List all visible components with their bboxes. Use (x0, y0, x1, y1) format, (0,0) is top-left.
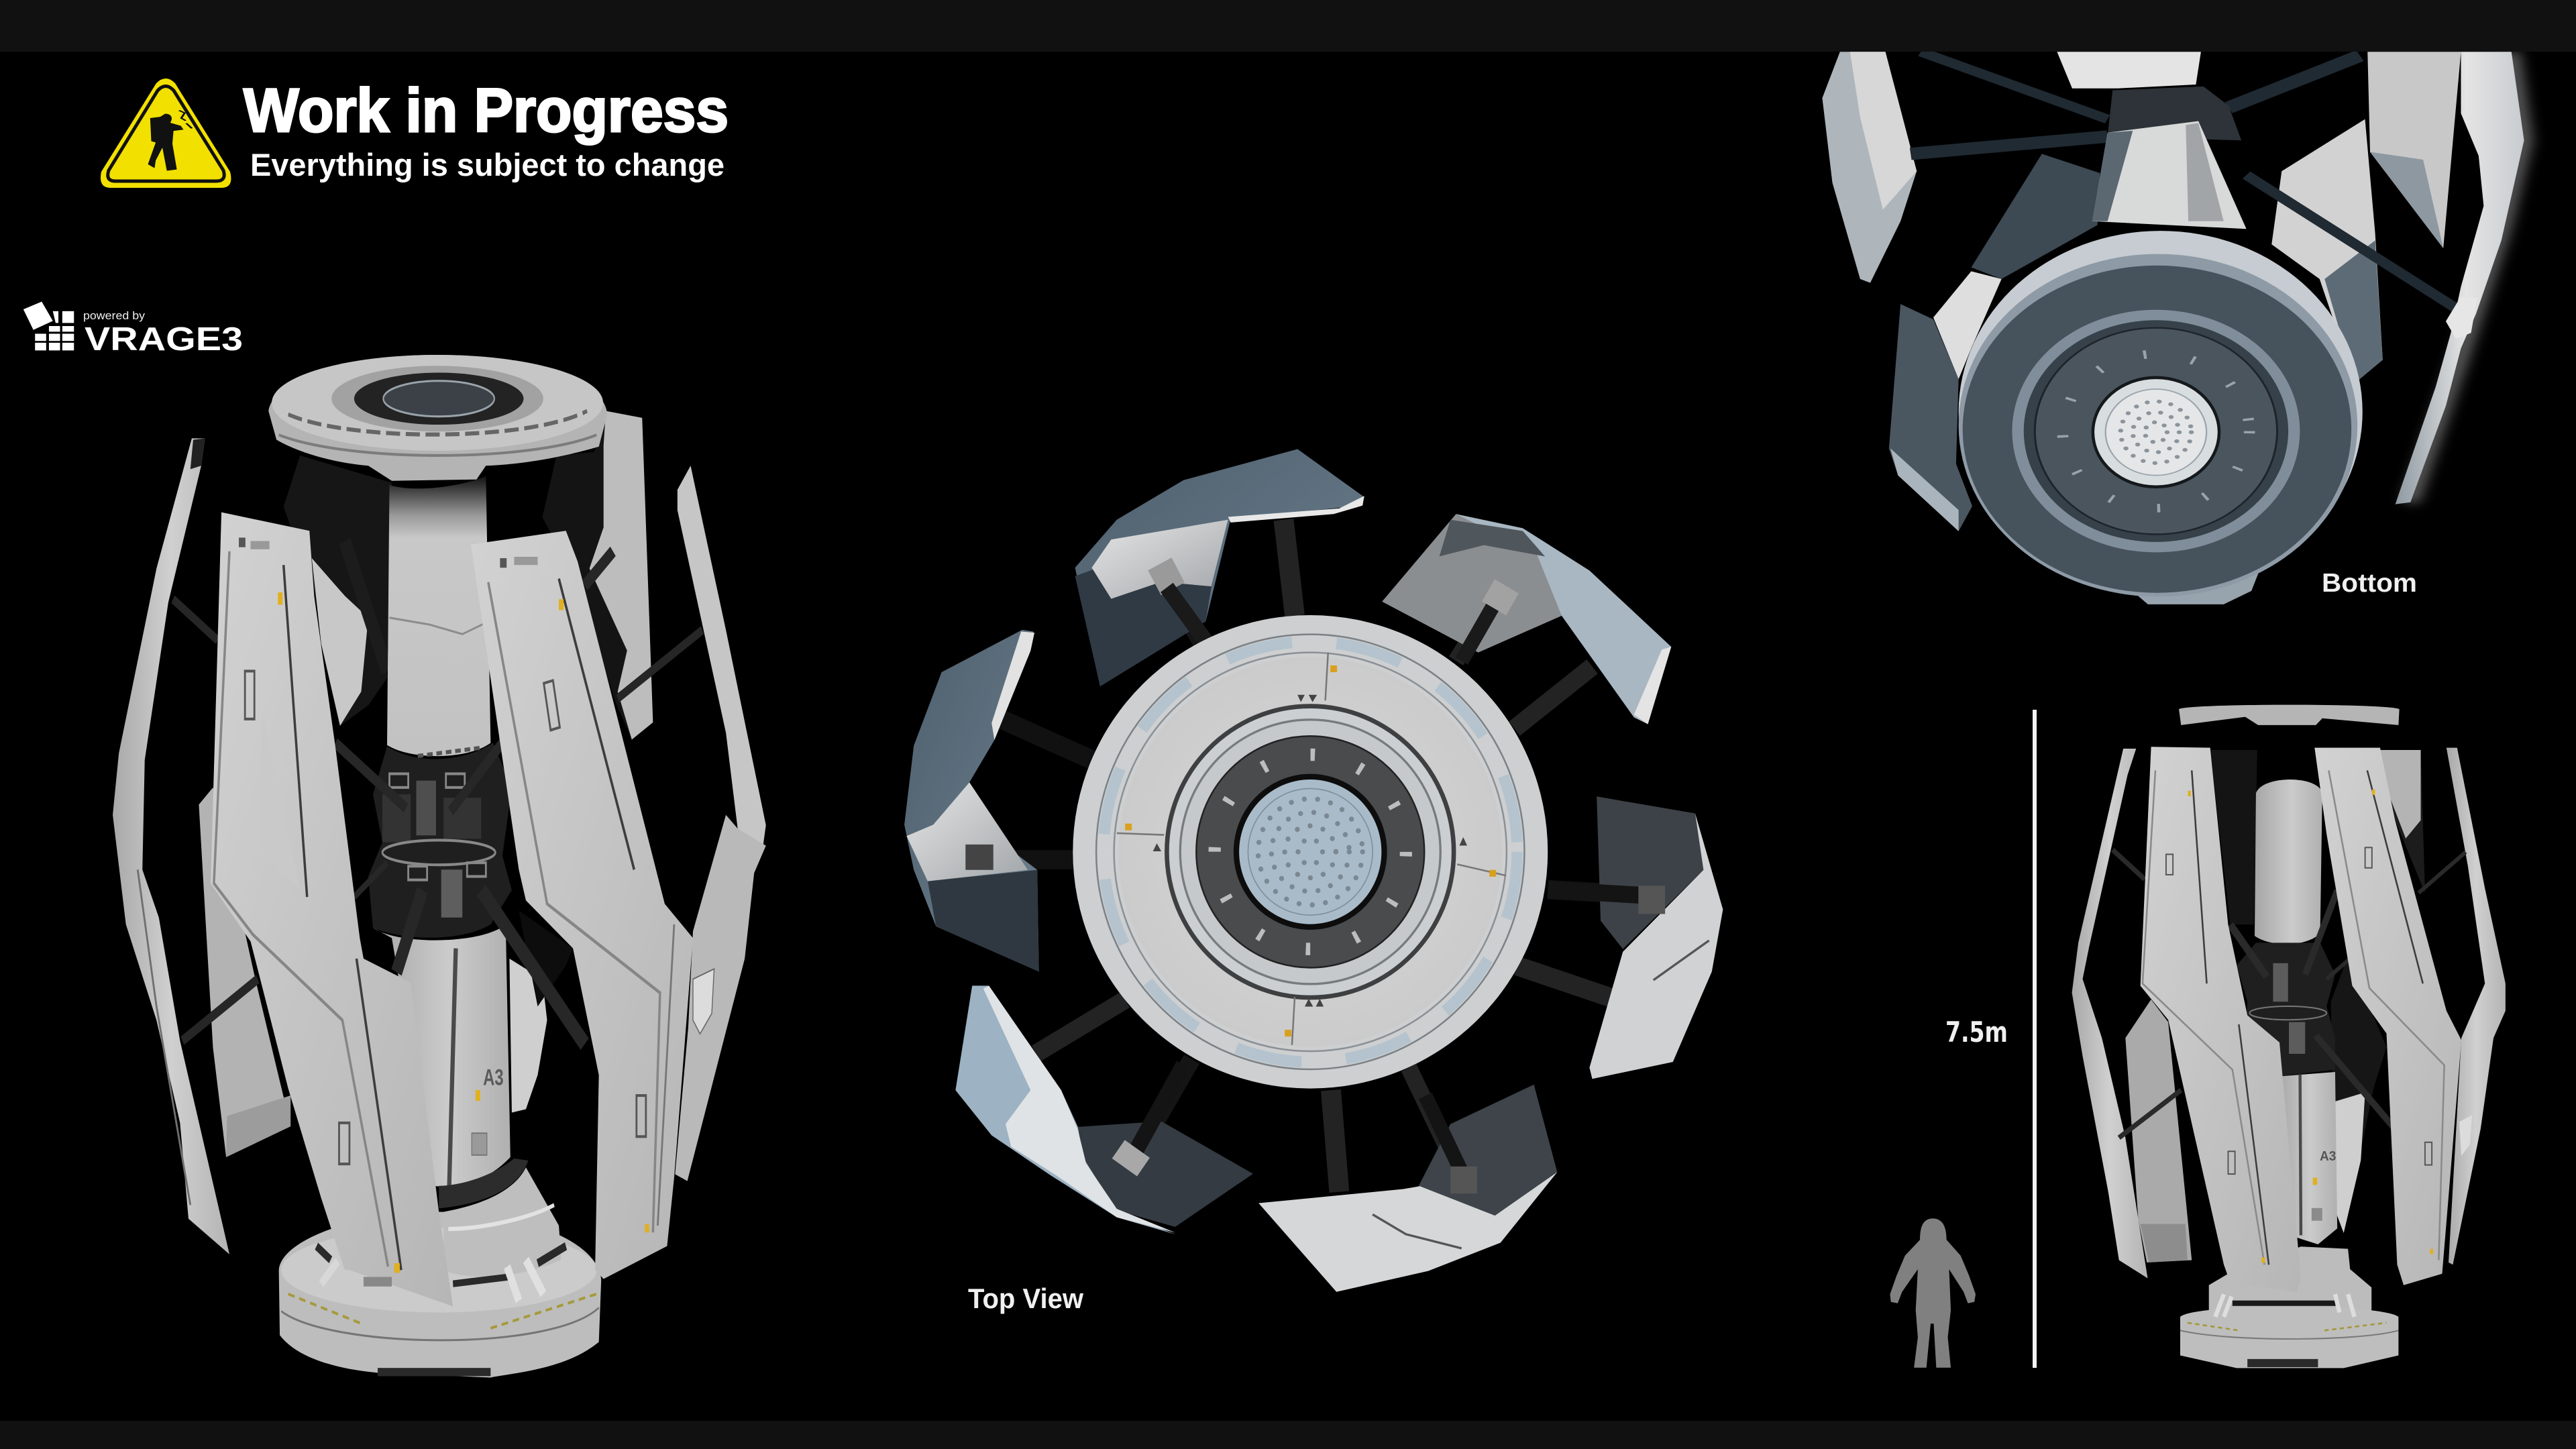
marking A3: A3 (2320, 1148, 2336, 1164)
logo: powered by VRAGE3: VRAGE3 (85, 321, 243, 358)
scale bar (2033, 710, 2037, 1368)
front left panel (211, 513, 453, 1306)
rods (2112, 850, 2466, 1138)
mechanical core (368, 743, 512, 938)
subtitle: Everything is subject to change (250, 147, 724, 182)
far right panel (675, 466, 766, 1181)
upper cylinder (2255, 780, 2322, 944)
glow around crescent panel (2410, 52, 2524, 502)
central column: lower cylinder (373, 924, 511, 1187)
front elevation view (2072, 705, 2506, 1368)
top disc seen from above (1073, 615, 1548, 1089)
back panels (2125, 750, 2425, 1263)
panel: right (1548, 796, 1723, 1079)
panel: left (904, 630, 1039, 971)
tapered column (2092, 121, 2247, 229)
top band (0, 0, 2576, 52)
far right panel (2447, 748, 2506, 1265)
far left panel (2072, 749, 2147, 1279)
panels behind (1822, 52, 2524, 531)
logo: powered by VRAGE3 (23, 302, 243, 358)
front right panel (471, 531, 693, 1279)
base (279, 1159, 601, 1377)
label: bottom: Bottom (2322, 569, 2417, 598)
core (2237, 943, 2335, 1077)
top disc (268, 355, 607, 481)
side hinge (2459, 1115, 2472, 1156)
label: top view: Top View (968, 1283, 1083, 1314)
front left panel (2141, 747, 2301, 1292)
human silhouette for scale (1890, 1218, 1976, 1368)
marking A3: A3 (483, 1065, 504, 1091)
far left panel (113, 438, 229, 1254)
central column: upper cylinder (387, 476, 490, 756)
front right panel (2314, 748, 2461, 1285)
panel: bottom left (955, 985, 1253, 1234)
support arms (991, 520, 1651, 1192)
base (2180, 1246, 2398, 1368)
panel: bottom right (1258, 1085, 1557, 1292)
lower cylinder (2277, 1072, 2337, 1244)
support rods (173, 541, 702, 1040)
panel: top left (1075, 449, 1364, 686)
bottom view (1822, 52, 2524, 604)
bottom band (0, 1421, 2576, 1449)
icon: work in progress warning sign (101, 78, 231, 188)
logo: powered by VRAGE3: powered by (83, 309, 146, 322)
rods (1911, 52, 2459, 310)
core struts (335, 739, 585, 1044)
top disc (2179, 705, 2400, 725)
top view (904, 449, 1723, 1292)
scale label 7.5m: 7.5m (1945, 1016, 2008, 1049)
main perspective view (113, 355, 766, 1377)
panel: top right (1382, 514, 1671, 724)
bottom disc (1959, 231, 2363, 604)
hinge (2446, 297, 2477, 339)
connector collar (2108, 87, 2241, 140)
back panels (199, 411, 653, 1157)
title: Work in Progress (244, 76, 729, 145)
